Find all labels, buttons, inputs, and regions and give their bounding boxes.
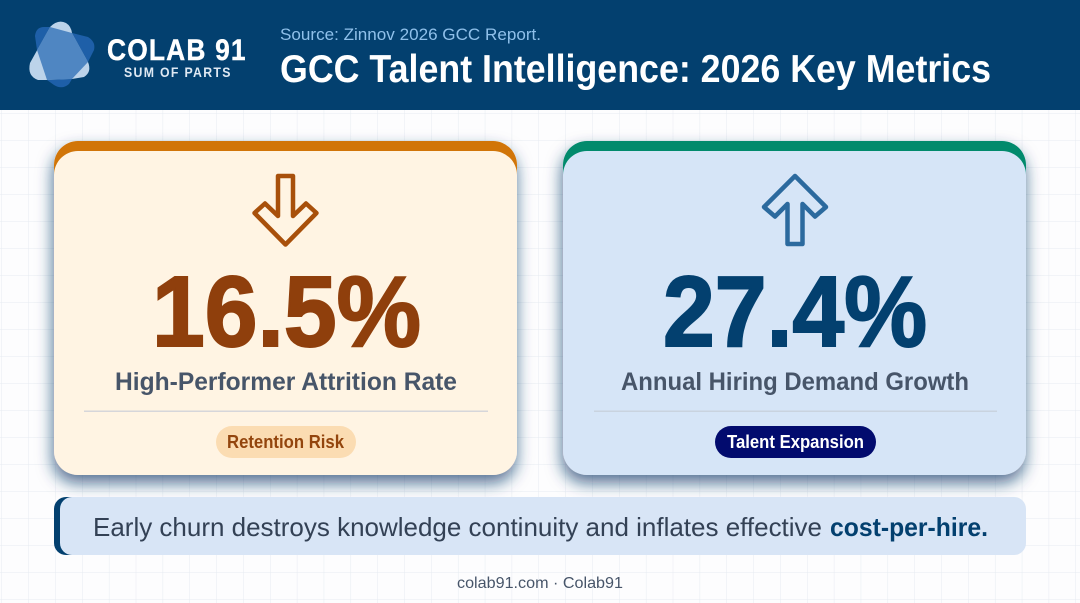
panel: hiring card xyxy=(563,141,1026,475)
callout text: Early churn destroys knowledge continuity and inflates effective xyxy=(93,512,822,542)
badge: retention risk: Retention Risk xyxy=(227,432,345,452)
icon: down arrow xyxy=(254,176,316,244)
logo text: SUM OF PARTS xyxy=(124,64,231,80)
header band xyxy=(0,0,1080,110)
title: GCC Talent Intelligence: 2026 Key Metrics xyxy=(280,48,991,91)
badge: talent expansion xyxy=(715,426,876,458)
callout text: cost-per-hire. xyxy=(830,512,988,542)
value: 16.5%: 16.5% xyxy=(152,256,421,368)
metric label: High-Performer Attrition Rate xyxy=(115,368,457,396)
icon: up arrow xyxy=(764,176,826,244)
footer: colab91.com · Colab91 xyxy=(457,575,623,592)
logo text: COLAB 91 xyxy=(107,32,246,66)
metric label: Annual Hiring Demand Growth xyxy=(621,368,969,396)
badge: talent expansion: Talent Expansion xyxy=(727,432,864,452)
callout bar xyxy=(54,497,1026,555)
value: 27.4%: 27.4% xyxy=(663,256,927,368)
source line: Source: Zinnov 2026 GCC Report. xyxy=(280,25,541,44)
logo mark xyxy=(29,22,94,87)
panel: attrition card xyxy=(54,141,517,475)
badge: retention risk xyxy=(216,426,356,458)
